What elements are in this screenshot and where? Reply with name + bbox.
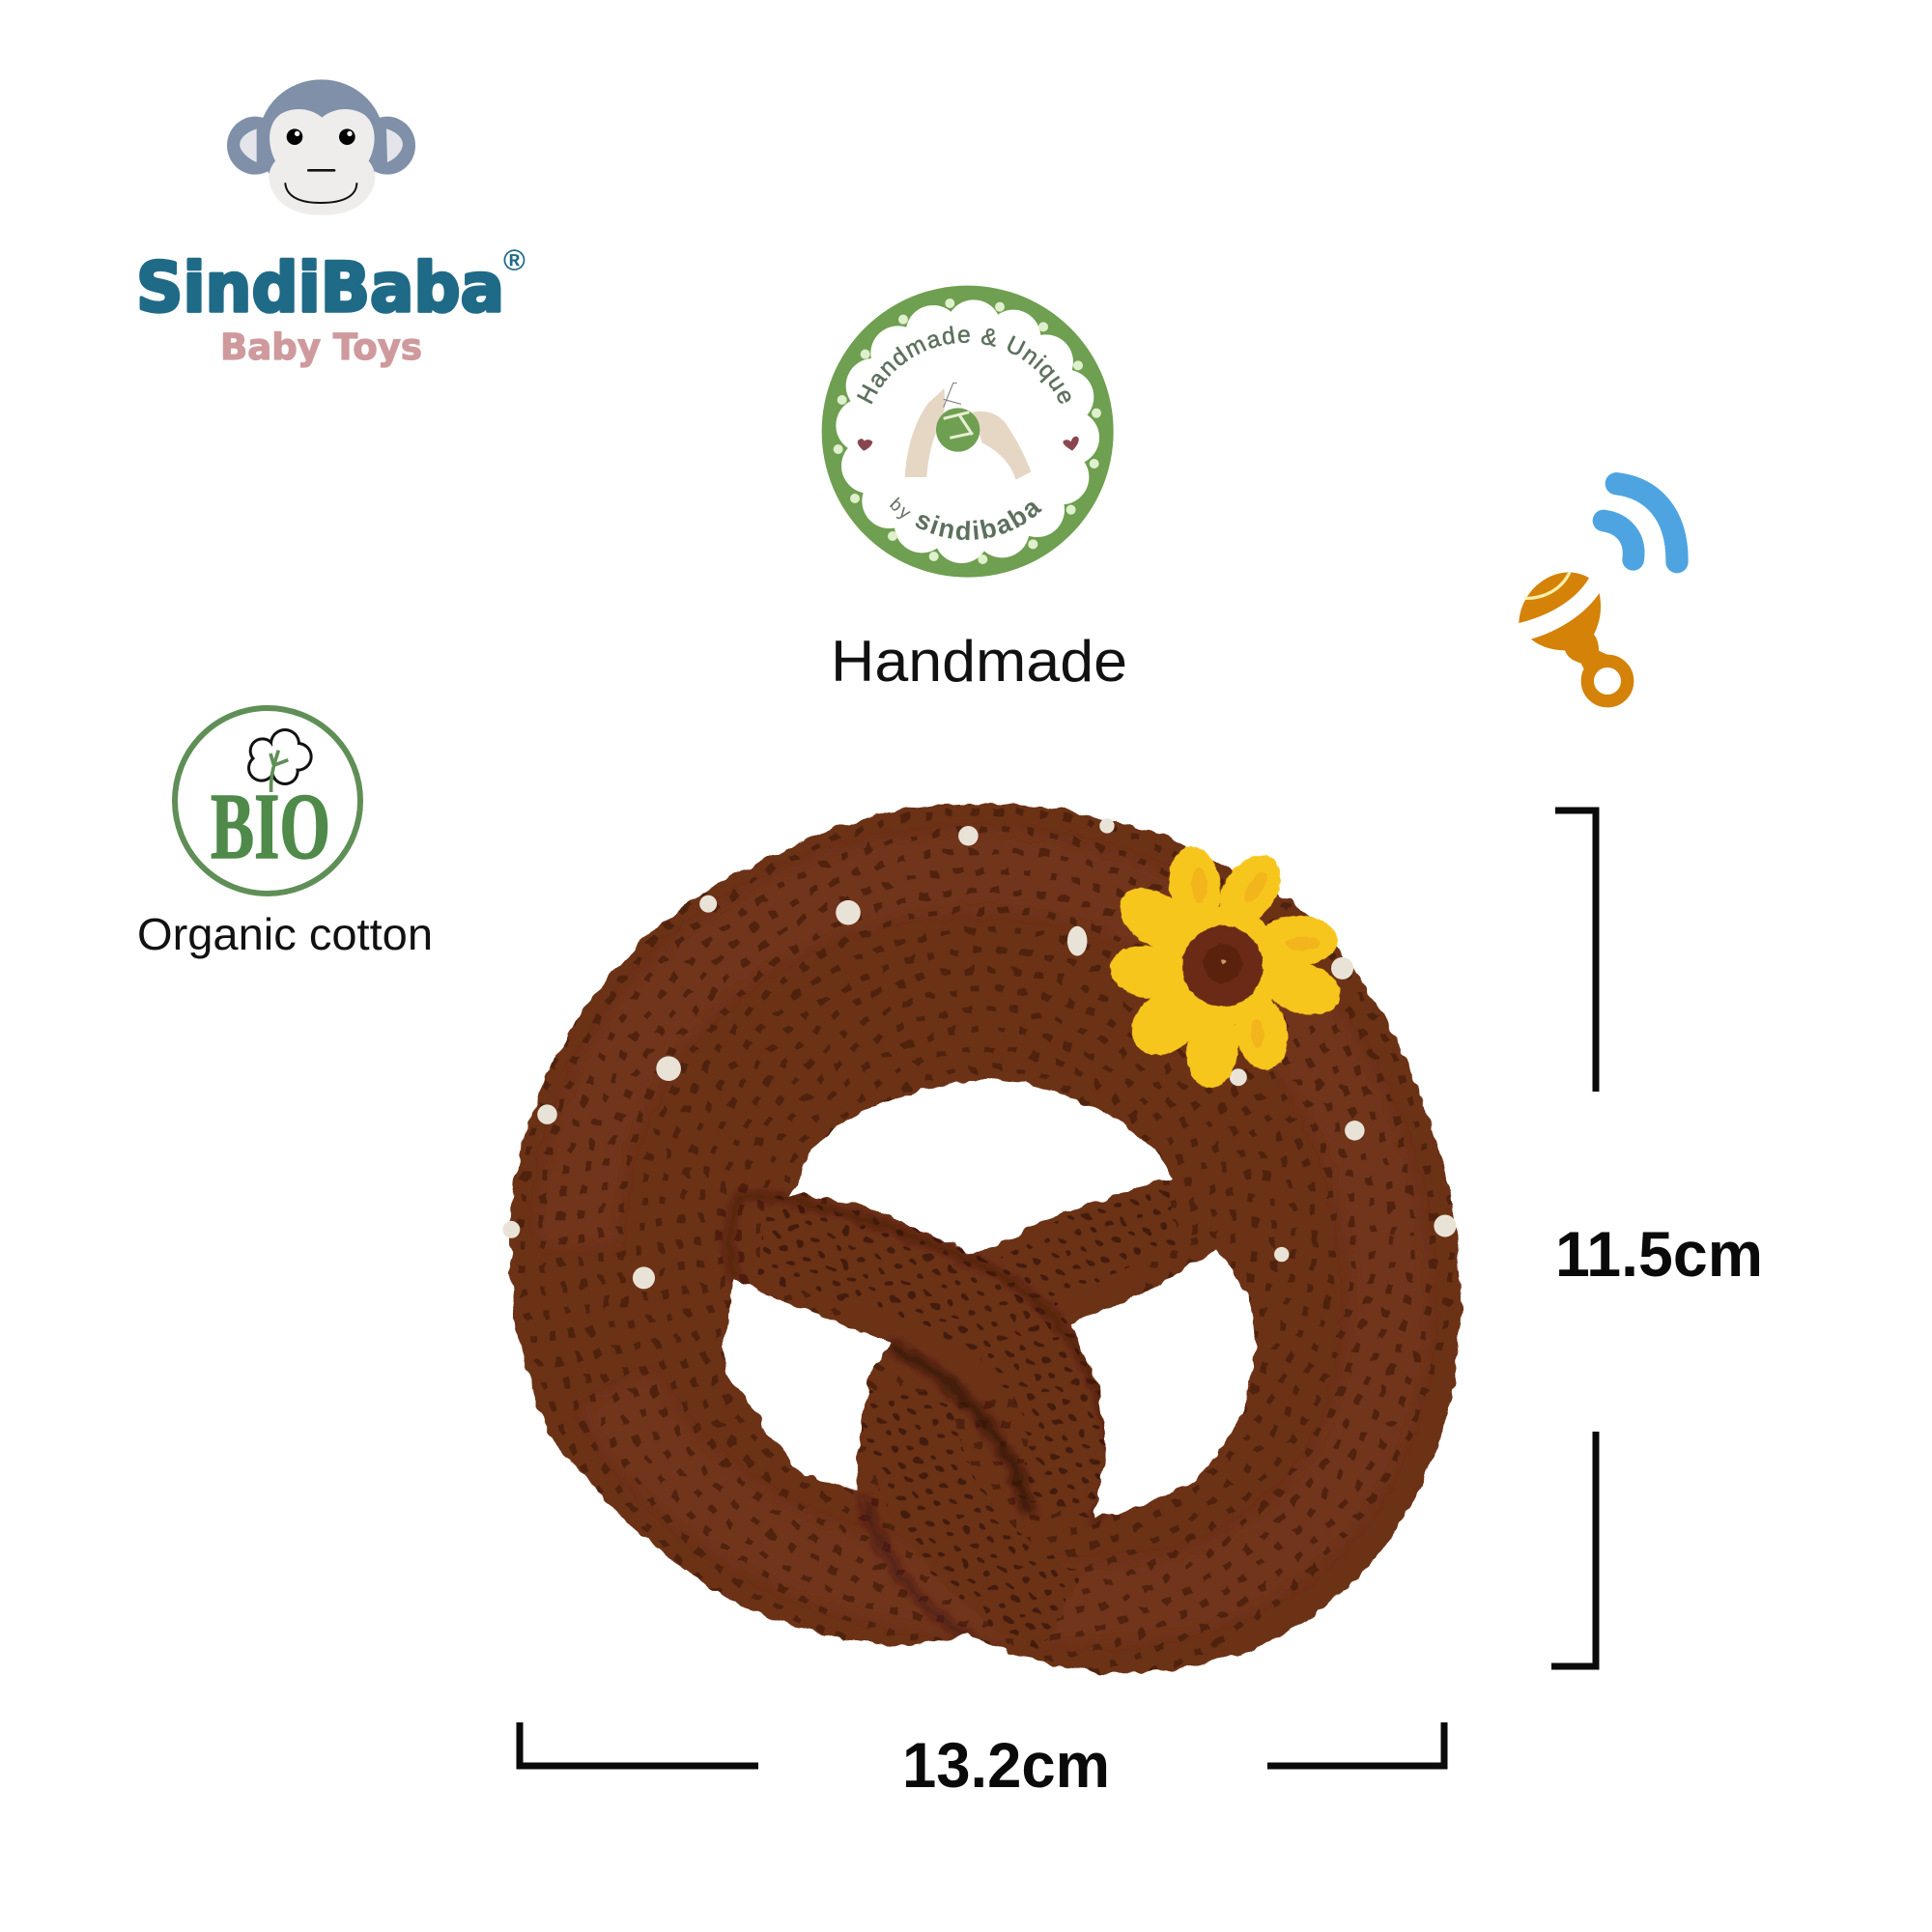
dimension bracket: height top xyxy=(1555,810,1596,1092)
dimension bracket: width left xyxy=(520,1722,758,1766)
logo: SindiBaba Baby Toys xyxy=(136,79,526,368)
badge arc text top: Handmade & Unique xyxy=(856,326,1070,404)
brand tagline: Baby Toys xyxy=(220,327,422,368)
label: Organic cotton: Organic cotton xyxy=(137,909,433,959)
arm overlaps xyxy=(729,1197,1113,1639)
scallop dots xyxy=(834,298,1101,564)
icon: heart right xyxy=(1063,437,1079,451)
dimension bracket: width right xyxy=(1267,1722,1444,1766)
icon: cotton boll xyxy=(247,728,313,792)
dimension bracket: height bottom xyxy=(1551,1432,1596,1666)
icon: heart left xyxy=(858,439,872,451)
brand name: SindiBaba xyxy=(136,248,504,327)
flower centre xyxy=(1182,925,1263,1007)
sprinkles xyxy=(502,818,1456,1289)
dimension label: width: 13.2cm xyxy=(902,1729,1110,1801)
scalloped white centre xyxy=(836,299,1099,563)
sunflower applique xyxy=(1106,843,1347,1090)
icon: hands knitting xyxy=(905,384,1031,480)
badge: BIO organic cotton xyxy=(175,708,360,894)
BIO wordmark: BIO xyxy=(211,775,330,879)
dimension label: height: 11.5cm xyxy=(1555,1218,1763,1290)
registered mark: ® xyxy=(503,243,526,277)
tube highlight shading xyxy=(579,871,1389,1603)
badge: Handmade & Unique by Sindibaba xyxy=(821,286,1114,578)
product photo: crochet pretzel rattle xyxy=(492,771,1482,1702)
crochet stitches following the ring xyxy=(522,771,1453,1702)
petal shading xyxy=(1192,867,1321,1048)
icon: rattle with sound waves xyxy=(1519,484,1677,701)
crochet stitches on the arms xyxy=(764,1212,1173,1614)
badge arc text bottom: by sindibaba xyxy=(889,497,1042,540)
icon: monkey face xyxy=(227,79,415,215)
label: Handmade: Handmade xyxy=(831,629,1127,694)
infographic canvas xyxy=(139,79,1760,1787)
